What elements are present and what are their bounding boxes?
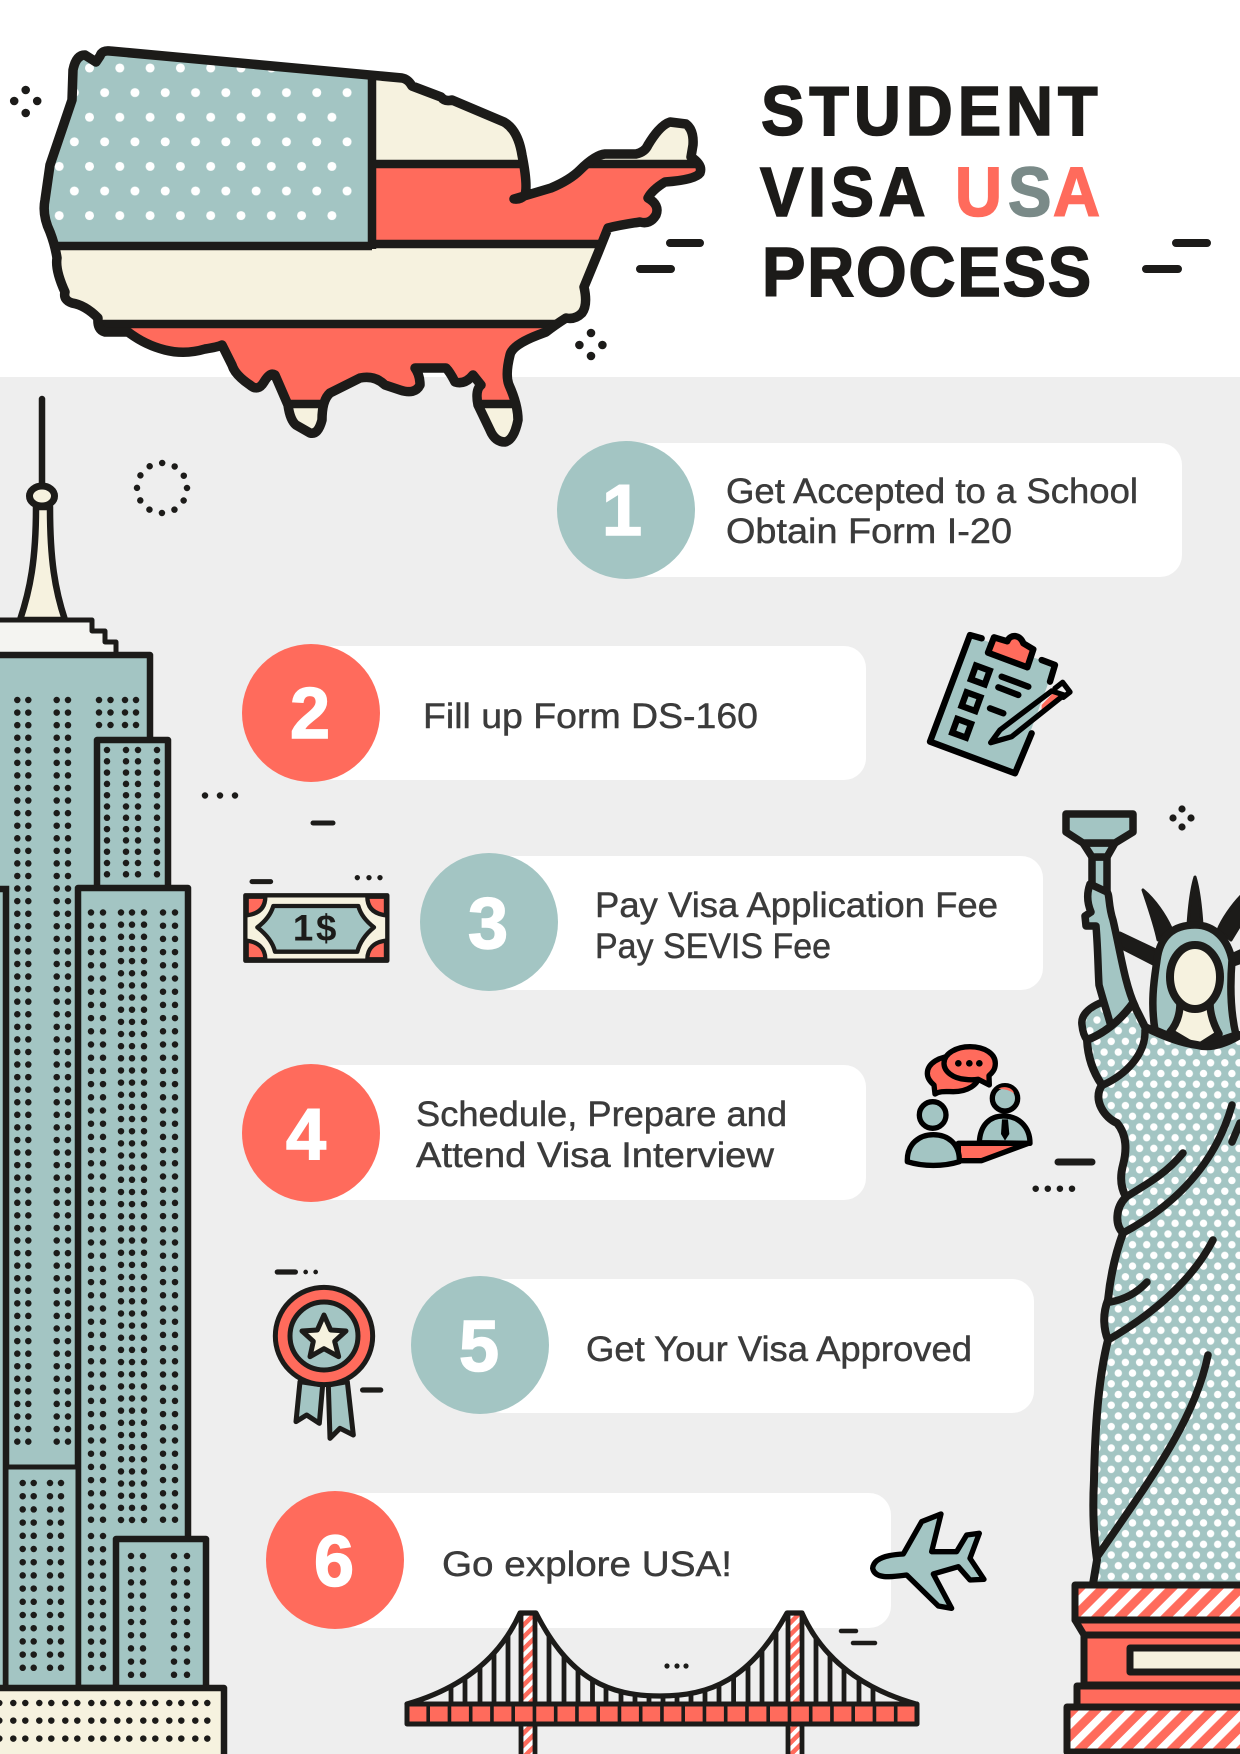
- number 6: [266, 1491, 404, 1629]
- text 3: Pay Visa Application Fee: [595, 886, 998, 925]
- suspender cables: [448, 1632, 876, 1702]
- text 4: Schedule, Prepare and: [416, 1095, 787, 1134]
- bridge: [407, 1610, 917, 1754]
- decoration: dots and dash near skyscraper: [205, 796, 333, 823]
- card 5: [480, 1279, 1034, 1413]
- icon: clipboard: [930, 635, 1070, 773]
- text 3: [595, 886, 998, 966]
- step 1: [557, 441, 1182, 579]
- head and veil: [1153, 925, 1236, 1048]
- text 3: Pay SEVIS Fee: [595, 927, 831, 966]
- title: S: [1008, 154, 1051, 232]
- number 4: [242, 1064, 380, 1202]
- number 5: [411, 1276, 549, 1414]
- decoration: dots and dashes near map: [10, 86, 1207, 360]
- text 1: [726, 472, 1138, 551]
- crown spikes: [1116, 877, 1240, 966]
- title: U: [955, 154, 1002, 232]
- text 5: Get Your Visa Approved: [586, 1330, 972, 1369]
- card 2: [311, 646, 866, 780]
- step 4: [242, 1064, 866, 1202]
- number 1: [557, 441, 695, 579]
- icon: airplane: [873, 1514, 984, 1608]
- number 3: [420, 853, 558, 991]
- raised arm: [1085, 884, 1135, 1030]
- title: STUDENT: [761, 73, 1098, 151]
- number 5: 5: [459, 1307, 499, 1387]
- torch: [1066, 814, 1133, 893]
- step 3: [420, 853, 1043, 991]
- elbow: [1082, 1003, 1133, 1040]
- dress: [1087, 1003, 1240, 1590]
- text 1: Obtain Form I-20: [726, 512, 1012, 551]
- skyscraper: [0, 399, 224, 1754]
- decoration: dash and dots near interview: [1036, 1162, 1092, 1189]
- text 1: Get Accepted to a School: [726, 472, 1138, 511]
- number 1: 1: [602, 471, 642, 551]
- title: PROCESS: [762, 234, 1091, 312]
- deck: [407, 1704, 917, 1724]
- number 3: 3: [468, 884, 508, 964]
- dress folds: [1097, 1030, 1240, 1557]
- number 2: 2: [290, 674, 330, 754]
- title: A: [1053, 154, 1100, 232]
- icon: dollar bill: 1$: [293, 908, 339, 949]
- USA flag map: [39, 46, 706, 447]
- card 4: [311, 1065, 866, 1200]
- statue of liberty: [1066, 814, 1240, 1752]
- number 6: 6: [314, 1522, 354, 1602]
- decoration: dots near torch: [1169, 805, 1195, 831]
- icon: medal: [275, 1270, 381, 1438]
- text 4: [416, 1095, 787, 1175]
- decoration: dots and dashes near bridge: [664, 1631, 875, 1669]
- step 6: [266, 1491, 891, 1629]
- text 2: Fill up Form DS-160: [423, 697, 758, 736]
- face: [1170, 945, 1220, 1009]
- step 5: [411, 1276, 1034, 1414]
- icon: interview: [907, 1047, 1030, 1165]
- text 6: Go explore USA!: [442, 1545, 732, 1584]
- card 1: [626, 443, 1182, 577]
- card 3: [489, 856, 1043, 990]
- background: gray lower area: [0, 377, 1240, 1754]
- icon: dollar bill: [245, 875, 387, 961]
- step 2: [242, 644, 866, 782]
- title: VISA: [760, 154, 926, 232]
- card 6: [335, 1493, 891, 1628]
- title: [760, 73, 1100, 312]
- pedestal: [1067, 1585, 1240, 1752]
- number 2: [242, 644, 380, 782]
- text 4: Attend Visa Interview: [416, 1136, 775, 1175]
- decoration: dotted circle: [137, 463, 187, 513]
- towers: [521, 1613, 802, 1754]
- number 4: 4: [286, 1095, 326, 1175]
- neck: [1170, 1003, 1219, 1048]
- main cables: [407, 1613, 916, 1704]
